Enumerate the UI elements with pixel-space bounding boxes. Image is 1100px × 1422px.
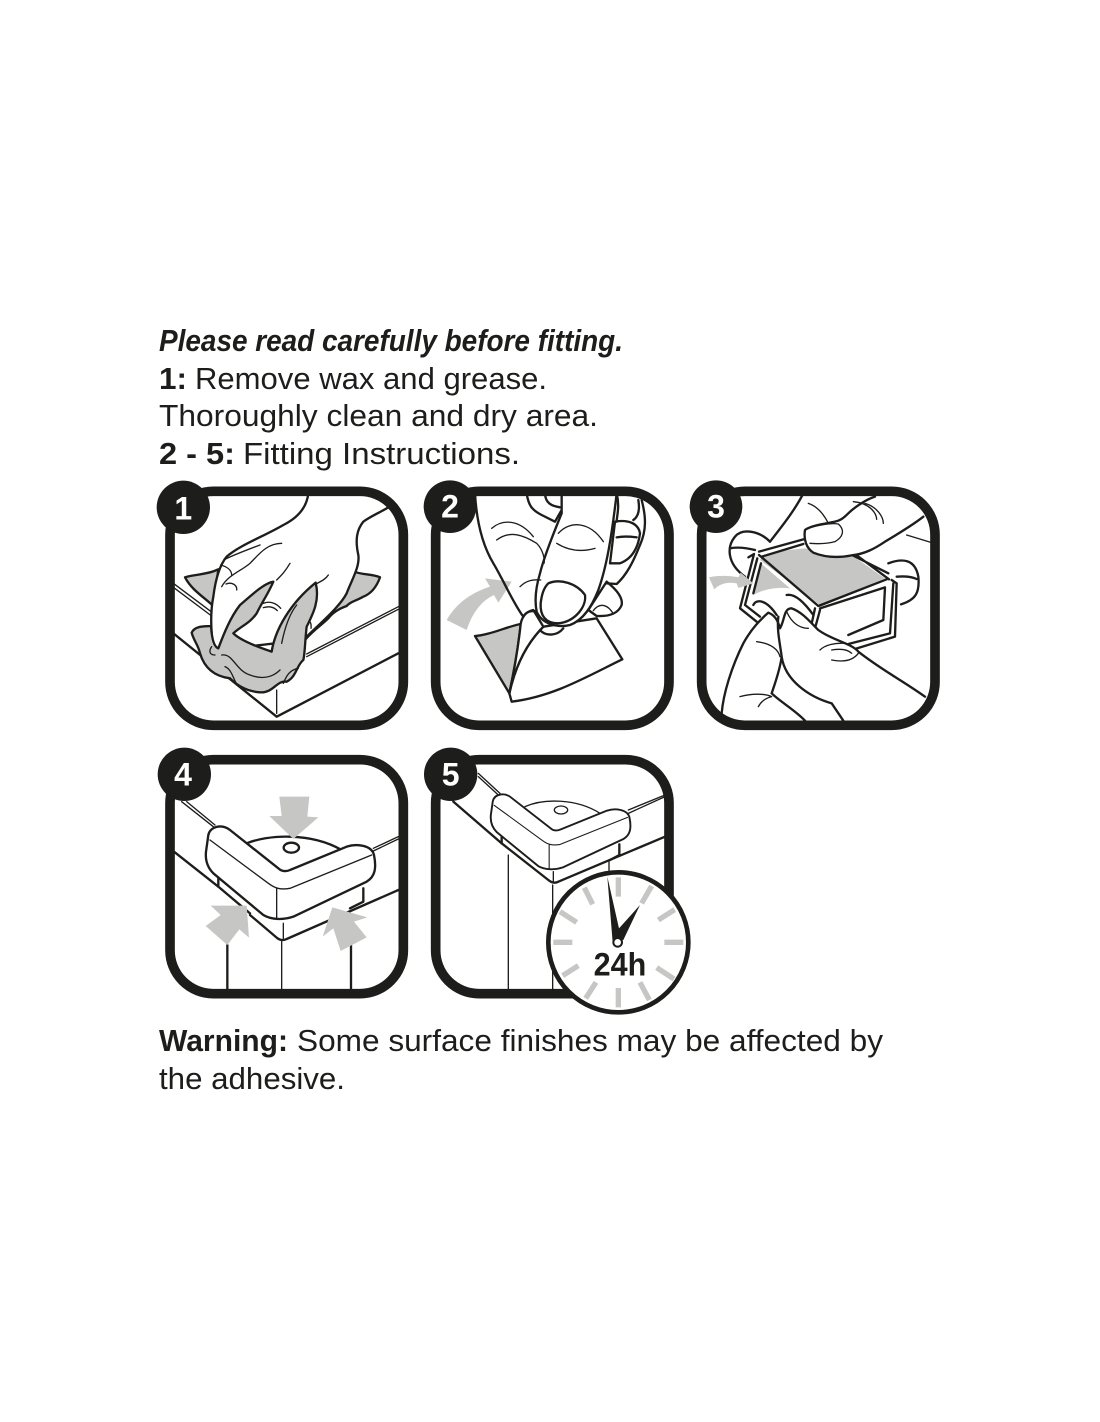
- step 1 instruction: Remove wax and grease.: [195, 361, 547, 396]
- side fingers: [730, 531, 919, 604]
- frame: [702, 491, 935, 725]
- step badge 5: [424, 748, 477, 801]
- clock hands: [607, 877, 640, 942]
- panel 3: remove backing from protector: [690, 480, 935, 725]
- protector pad: [218, 877, 363, 913]
- step badge 4: [158, 748, 211, 801]
- arrow: right: [323, 907, 367, 951]
- protector details: [210, 840, 372, 918]
- panel 2: peel the backing: [424, 480, 669, 725]
- cleaning instruction: Thoroughly clean and dry area.: [159, 398, 598, 433]
- cloth folds: [210, 605, 298, 687]
- step badge 1: 1: [174, 490, 192, 526]
- protector tray: [740, 539, 897, 650]
- hand: [211, 493, 388, 650]
- step badge 5: 5: [442, 757, 460, 793]
- step badge 3: [690, 480, 742, 533]
- steps 2 to 5 instruction: 2 - 5:: [159, 436, 235, 471]
- frame: [170, 760, 403, 994]
- arrow: left: [206, 906, 249, 945]
- warning text: Warning:: [159, 1023, 288, 1058]
- corner protector: [206, 826, 375, 919]
- frame: [436, 760, 669, 994]
- clock pivot: [613, 938, 622, 947]
- step badge 3: 3: [707, 488, 725, 524]
- table edges: [453, 773, 665, 990]
- thumb details: [807, 502, 932, 544]
- warning text: [159, 1023, 884, 1096]
- lower hand details: [753, 595, 843, 721]
- steps 2 to 5 instruction: Fitting Instructions.: [243, 436, 520, 471]
- backing paper: [509, 618, 622, 702]
- cloth flaps: [185, 569, 380, 640]
- clock ticks: [553, 877, 683, 1007]
- table edges: [173, 583, 398, 717]
- top hand: [770, 493, 803, 542]
- heading and intro text: [159, 323, 623, 471]
- fingernail: [541, 581, 585, 623]
- warning text: the adhesive.: [159, 1061, 345, 1096]
- clock: [548, 872, 688, 1012]
- peeled corner: [475, 624, 521, 693]
- step badge 2: [424, 480, 476, 533]
- 24h label: 24h: [594, 947, 646, 983]
- step 1 instruction: 1:: [159, 361, 187, 396]
- lower hands: [722, 608, 925, 713]
- thumb: [805, 497, 923, 557]
- frame: [170, 491, 403, 725]
- finger creases: [492, 522, 603, 587]
- arrow: [447, 578, 512, 630]
- warning text: Some surface finishes may be affected by: [297, 1023, 884, 1058]
- arrow: [709, 573, 753, 589]
- protector pad: [502, 833, 619, 860]
- title: Please read carefully before fitting.: [159, 323, 623, 358]
- cloth in hand: [192, 582, 317, 692]
- arrow: down: [269, 797, 318, 839]
- adhesive dome: [525, 801, 600, 814]
- frame: [436, 491, 669, 725]
- panel 5: wait 24 hours: [424, 748, 688, 1012]
- panel 1: wipe the surface: [157, 481, 403, 725]
- hand details: [221, 543, 328, 628]
- adhesive dome: [247, 837, 342, 853]
- step badge 2: 2: [441, 488, 459, 524]
- hand and fingers: [475, 493, 645, 635]
- panel 4: press protector onto corner: [158, 748, 403, 994]
- peeled flap: [509, 610, 543, 693]
- corner protector: [491, 794, 630, 869]
- table edges: [174, 802, 398, 990]
- step badge 4: 4: [174, 757, 192, 793]
- step badge 1: [157, 481, 210, 534]
